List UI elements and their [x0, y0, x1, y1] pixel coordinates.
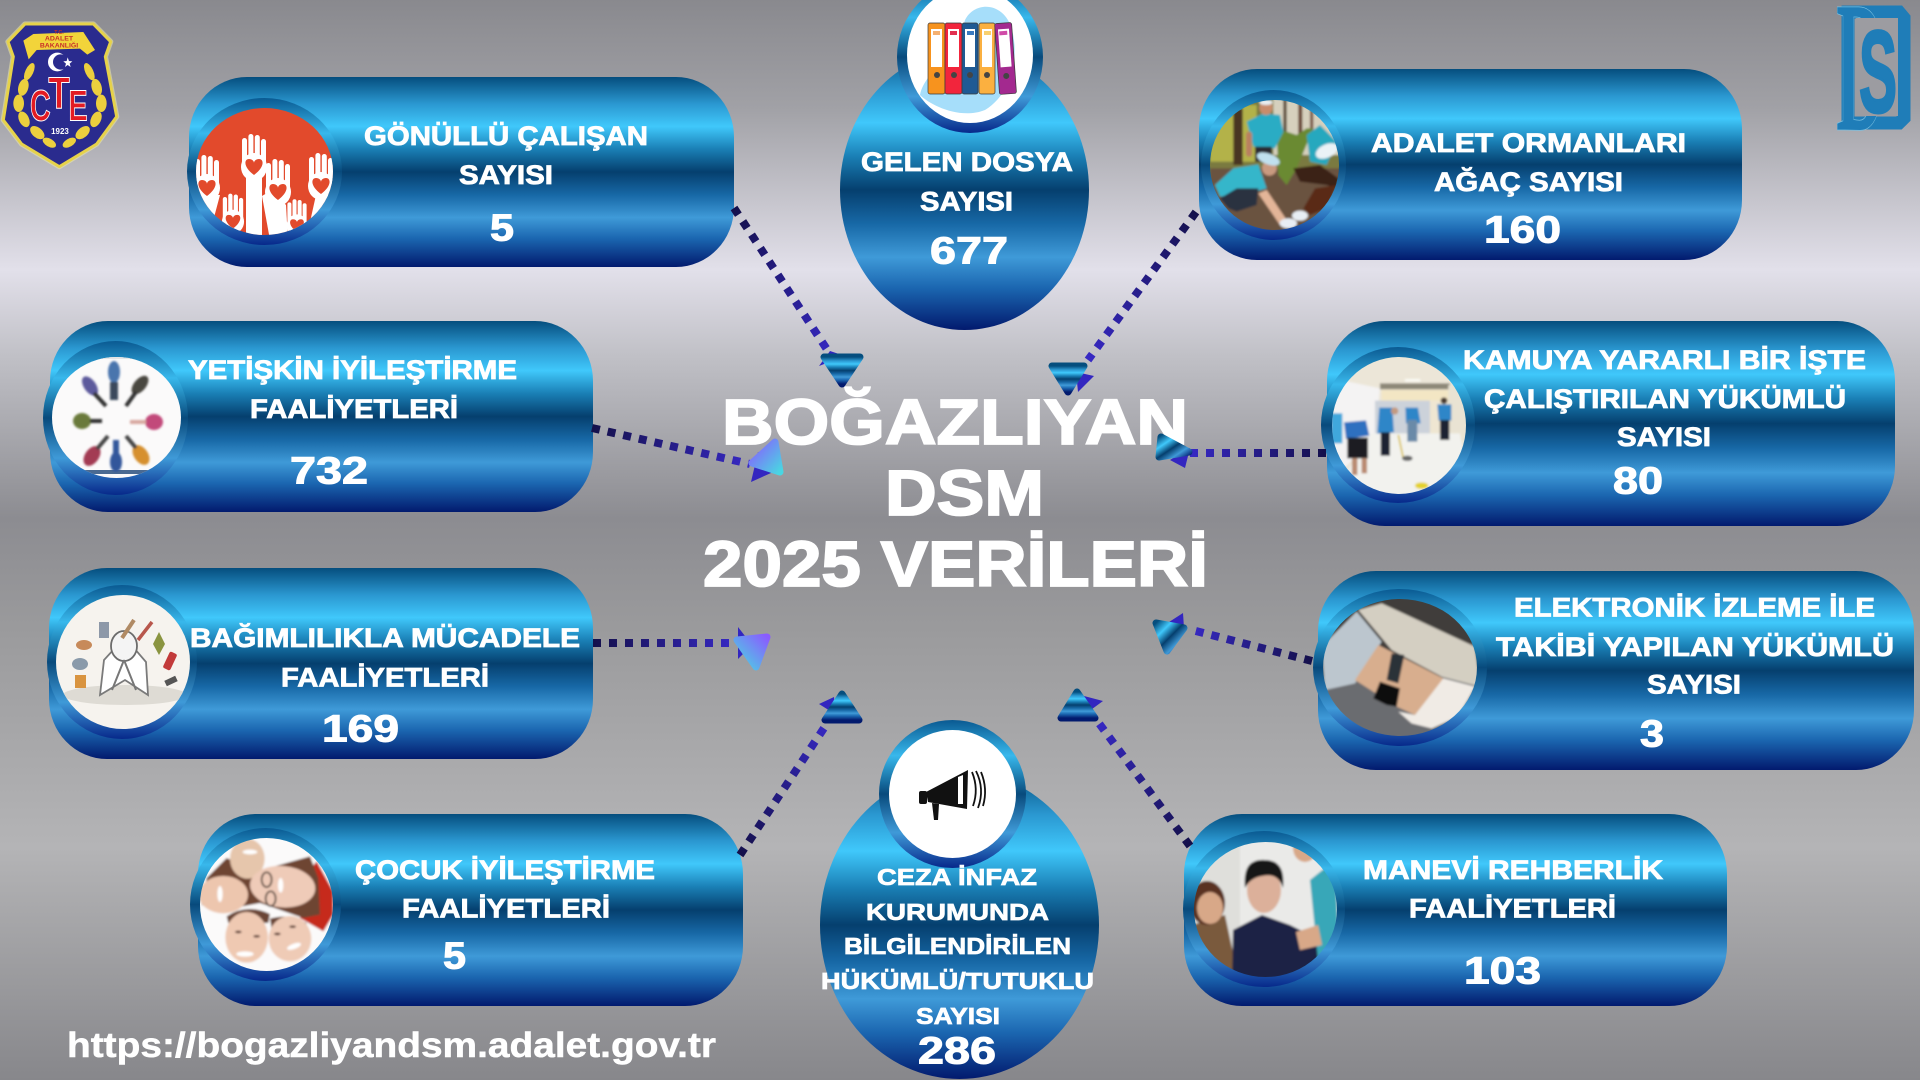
text: kamuya yararli is: ÇALIŞTIRILAN YÜKÜMLÜ [1484, 384, 1846, 414]
text: bagimlilikla mucadele: FAALİYETLERİ [281, 662, 489, 692]
arrow: kamuya to title [1159, 437, 1326, 468]
photo: children [190, 828, 350, 988]
logo: CTE shield: 1923 [51, 127, 69, 136]
arrow: elektronik to title [1156, 613, 1312, 661]
text: elektronik izleme: ELEKTRONİK İZLEME İLE [1514, 592, 1875, 622]
text: yetiskin iyilestirme: 732 [290, 450, 368, 492]
photo: ankle monitor [1313, 589, 1490, 750]
panel: elektronik izleme [1313, 571, 1914, 770]
text: cocuk iyilestirme: FAALİYETLERİ [402, 893, 610, 923]
arrow: cocuk to title [740, 694, 859, 855]
text: manevi rehberlik: 103 [1464, 950, 1541, 992]
logo: CTE shield: C [30, 83, 51, 131]
logo: CTE shield: T.C. [54, 30, 64, 36]
text: adalet ormanlari [1371, 128, 1686, 252]
website url: https://bogazliyandsm.adalet.gov.tr [67, 1026, 716, 1065]
text: adalet ormanlari: AĞAÇ SAYISI [1434, 167, 1623, 197]
title [703, 386, 1208, 600]
text: gonullu calisan: SAYISI [459, 160, 553, 190]
text: adalet ormanlari: ADALET ORMANLARI [1371, 128, 1686, 158]
photo: cleaning corridor [1320, 345, 1480, 505]
photo: adults in circle [43, 341, 188, 495]
text: ceza infaz: CEZA İNFAZ [877, 864, 1037, 890]
photo: addiction figure [47, 585, 197, 739]
arrow: adalet to title [1052, 212, 1196, 392]
text: gelen dosya: GELEN DOSYA [861, 147, 1073, 177]
text: kamuya yararli is [1463, 345, 1866, 502]
text: manevi rehberlik [1363, 855, 1663, 992]
panel: manevi rehberlik [1183, 814, 1727, 1006]
text: ceza infaz: HÜKÜMLÜ/TUTUKLU [821, 968, 1094, 994]
text: yetiskin iyilestirme: FAALİYETLERİ [250, 394, 458, 424]
panel: gelen dosya sayisi [840, 0, 1089, 330]
text: cocuk iyilestirme: 5 [443, 936, 466, 978]
text: adalet ormanlari: 160 [1484, 210, 1561, 252]
logo: CTE shield: BAKANLIĞI [40, 41, 79, 49]
text: elektronik izleme [1496, 592, 1894, 756]
photo: helping hands [187, 98, 342, 245]
text: cocuk iyilestirme [355, 855, 655, 978]
arrow: yetiskin to title [592, 428, 780, 482]
icon: megaphone [879, 720, 1026, 868]
panel: adalet ormanlari [1199, 69, 1742, 260]
text: manevi rehberlik: FAALİYETLERİ [1409, 893, 1616, 923]
panel: cocuk iyilestirme [190, 814, 743, 1006]
text: elektronik izleme: TAKİBİ YAPILAN YÜKÜMLÜ [1496, 632, 1894, 662]
panel: bagimlilikla mucadele [47, 568, 593, 759]
text: yetiskin iyilestirme [188, 355, 517, 492]
panel: gonullu calisan [187, 77, 734, 267]
text: bagimlilikla mucadele [190, 623, 580, 750]
text: kamuya yararli is: SAYISI [1617, 422, 1711, 452]
text: bagimlilikla mucadele: BAĞIMLILIKLA MÜCADELE [190, 623, 580, 653]
text: elektronik izleme: 3 [1640, 714, 1664, 756]
photo: tree planting [1201, 90, 1346, 240]
arrow: manevi to title [1061, 692, 1190, 846]
title: 2025 VERİLERİ [703, 528, 1208, 600]
panel: kamuya yararli is [1320, 321, 1895, 526]
text: gelen dosya: SAYISI [920, 186, 1013, 216]
text: cocuk iyilestirme: ÇOCUK İYİLEŞTİRME [355, 855, 655, 885]
text: gonullu calisan [364, 121, 648, 250]
panel: yetiskin iyilestirme [43, 321, 593, 512]
text: ceza infaz [821, 864, 1094, 1072]
logo: CTE shield: E [68, 83, 88, 131]
text: ceza infaz: SAYISI [916, 1003, 1000, 1029]
arrow: bagimlilik to title [593, 627, 767, 667]
icon: binders [897, 0, 1043, 133]
text: ceza infaz: KURUMUNDA [866, 899, 1049, 925]
text: kamuya yararli is: 80 [1613, 460, 1663, 502]
photo: counselling [1183, 831, 1345, 987]
panel: ceza infaz [820, 720, 1099, 1079]
logo: CTE shield [3, 24, 117, 167]
text: gelen dosya: 677 [930, 230, 1008, 272]
title: BOĞAZLIYAN [722, 386, 1188, 458]
text: gonullu calisan: GÖNÜLLÜ ÇALIŞAN [364, 121, 648, 151]
text: gonullu calisan: 5 [490, 208, 514, 250]
arrow: gonullu to title [734, 208, 860, 384]
logo: CTE shield: T [48, 69, 70, 118]
text: bagimlilikla mucadele: 169 [322, 708, 399, 750]
title: DSM [885, 457, 1044, 529]
text: ceza infaz: BİLGİLENDİRİLEN [844, 933, 1071, 959]
text: ceza infaz: 286 [918, 1030, 996, 1072]
text: elektronik izleme: SAYISI [1647, 669, 1741, 699]
text: gelen dosya [861, 147, 1073, 272]
text: manevi rehberlik: MANEVİ REHBERLİK [1363, 855, 1663, 885]
logo: CTE shield: ADALET [45, 37, 74, 43]
text: yetiskin iyilestirme: YETİŞKİN İYİLEŞTİRME [188, 355, 517, 385]
text: kamuya yararli is: KAMUYA YARARLI BİR İŞTE [1463, 345, 1866, 375]
